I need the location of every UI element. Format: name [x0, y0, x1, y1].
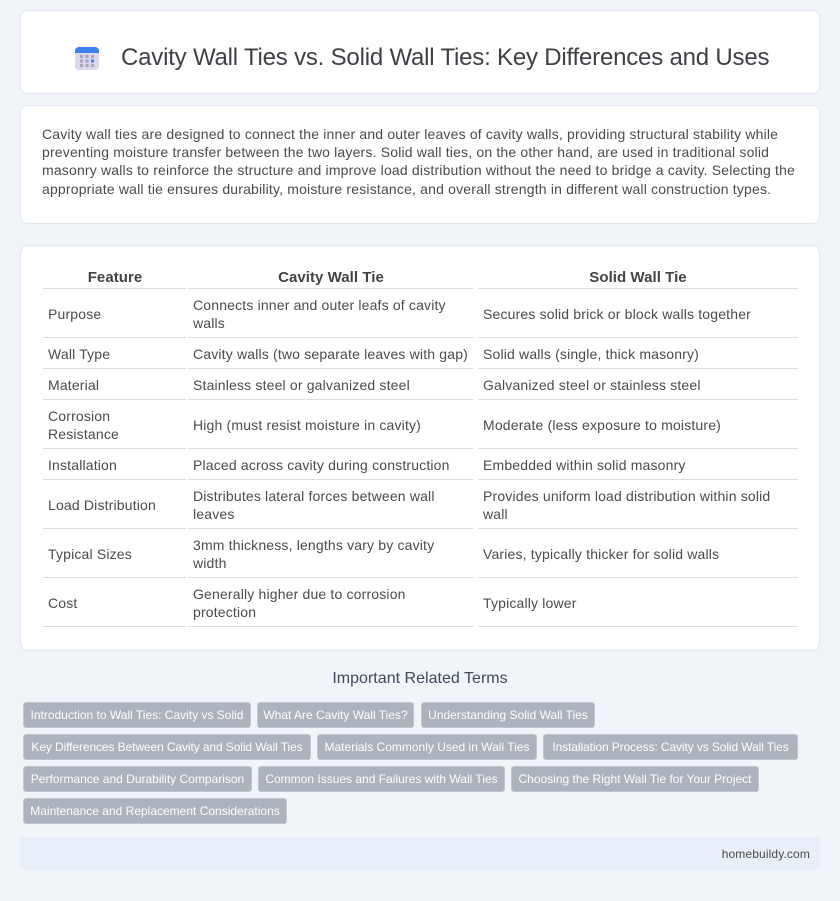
related terms heading: Important Related Terms: [332, 670, 508, 687]
table rows: Embedded within solid masonry: [483, 457, 686, 473]
table rows: Distributes lateral forces between wall: [193, 488, 435, 504]
related terms tags: Understanding Solid Wall Ties: [428, 708, 588, 722]
intro text: [42, 126, 795, 197]
table rows: Generally higher due to corrosion: [193, 586, 406, 602]
table rows: High (must resist moisture in cavity): [193, 417, 421, 433]
table rows: Connects inner and outer leafs of cavity: [193, 297, 446, 313]
intro text: masonry walls to reinforce the structure and improve load distribution without the need to bridge a cavity. Selecting the: [42, 162, 795, 178]
table rows: Load Distribution: [48, 497, 156, 513]
intro text: preventing moisture transfer between the two layers. Solid wall ties, on the other hand, are used in traditional solid: [42, 144, 769, 160]
table rows: Solid walls (single, thick masonry): [483, 346, 699, 362]
table rows: Typical Sizes: [48, 546, 132, 562]
table rows: Purpose: [48, 306, 101, 322]
table rows: Wall Type: [48, 346, 110, 362]
table rows: wall: [483, 506, 508, 522]
related terms tags: Maintenance and Replacement Considerations: [30, 804, 280, 818]
related terms tags: Common Issues and Failures with Wall Ties: [265, 772, 498, 786]
related terms tags: Installation Process: Cavity vs Solid Wall Ties: [552, 740, 789, 754]
table rows: Resistance: [48, 426, 119, 442]
table header: Feature: [88, 269, 142, 286]
intro panel: [20, 105, 820, 224]
table rows: Moderate (less exposure to moisture): [483, 417, 721, 433]
related terms tags: [23, 702, 798, 824]
table rows: leaves: [193, 506, 234, 522]
related terms tags: What Are Cavity Wall Ties?: [263, 708, 408, 722]
header card: [20, 10, 820, 94]
intro text: appropriate wall tie ensures durability, moisture resistance, and overall strength in different wall construction types.: [42, 181, 771, 197]
title: Cavity Wall Ties vs. Solid Wall Ties: Key Differences and Uses: [121, 44, 769, 71]
intro text: Cavity wall ties are designed to connect the inner and outer leaves of cavity walls, providing structural stability while: [42, 126, 778, 142]
related terms tags: Introduction to Wall Ties: Cavity vs Solid: [30, 708, 243, 722]
icon: calendar: [75, 47, 99, 70]
table rows: Galvanized steel or stainless steel: [483, 377, 701, 393]
related terms tags: Choosing the Right Wall Tie for Your Project: [518, 772, 752, 786]
table rows: protection: [193, 604, 256, 620]
comparison table panel: [20, 245, 820, 651]
table rows: 3mm thickness, lengths vary by cavity: [193, 537, 434, 553]
table rows: Cavity walls (two separate leaves with gap): [193, 346, 468, 362]
table rows: width: [193, 555, 227, 571]
table rows: Varies, typically thicker for solid walls: [483, 546, 719, 562]
related terms tags: Key Differences Between Cavity and Solid Wall Ties: [31, 740, 303, 754]
table rows: Cost: [48, 595, 77, 611]
table header: Cavity Wall Tie: [278, 269, 384, 286]
table rows: Secures solid brick or block walls together: [483, 306, 751, 322]
table rows: Placed across cavity during construction: [193, 457, 450, 473]
table rows: Material: [48, 377, 99, 393]
table rows: walls: [193, 315, 225, 331]
table rows: Corrosion: [48, 408, 110, 424]
table header: [88, 269, 687, 286]
related terms tags: Performance and Durability Comparison: [31, 772, 244, 786]
table header: Solid Wall Tie: [589, 269, 687, 286]
table rows: Stainless steel or galvanized steel: [193, 377, 410, 393]
related terms tags: Materials Commonly Used in Wall Ties: [325, 740, 529, 754]
table rows: Provides uniform load distribution within solid: [483, 488, 770, 504]
footer source text: homebuildy.com: [722, 847, 810, 861]
table rows: [43, 288, 798, 627]
table rows: Installation: [48, 457, 117, 473]
table rows: Typically lower: [483, 595, 577, 611]
footer: [20, 837, 820, 870]
